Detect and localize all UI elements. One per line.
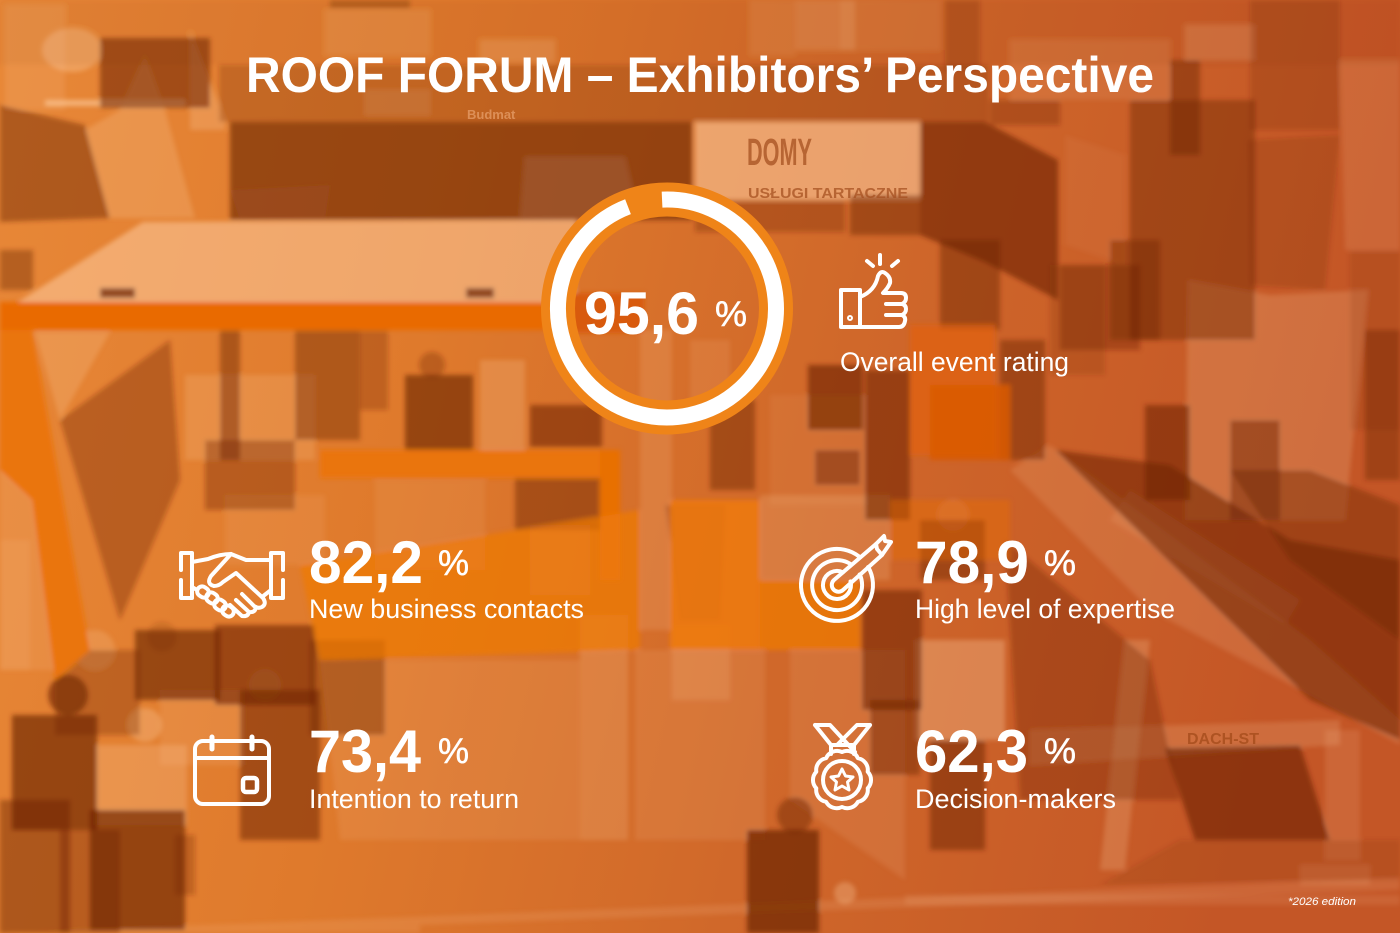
value: 62,3 [915,718,1028,785]
title: ROOF FORUM – Exhibitors’ Perspective [246,47,1154,103]
label: New business contacts [309,594,584,624]
stat: new business contacts [181,529,584,624]
value: 73,4 [309,718,422,785]
label: High level of expertise [915,594,1175,624]
percent sign: % [438,544,469,583]
label: Decision-makers [915,784,1116,814]
stat: intention to return [195,718,519,814]
icon: medal [813,725,871,808]
background: tinted exhibition hall photo: Budmat [467,107,516,122]
value: 78,9 [915,529,1029,596]
label: Overall event rating [840,347,1069,377]
stat: overall event rating [840,255,1069,377]
background: tinted exhibition hall photo: DACH-ST [1187,731,1259,748]
percent sign: % [1044,732,1076,771]
icon: calendar [195,737,269,804]
donut chart: overall event rating [558,199,776,418]
value: 82,2 [309,529,423,596]
stat: decision-makers [813,718,1116,814]
icon: target with arrow [801,536,891,621]
percent sign: % [438,732,469,771]
icon: handshake [181,553,283,619]
saturated orange areas [0,302,545,330]
background: tinted exhibition hall photo: DOMY [747,132,812,174]
percent sign: % [1044,544,1076,583]
donut value: 95,6 [584,280,699,347]
background: tinted exhibition hall photo: USŁUGI TARTACZNE [748,185,908,202]
stat: high level of expertise [801,529,1175,624]
footnote: *2026 edition [1288,896,1356,908]
label: Intention to return [309,784,519,814]
icon: thumbs up [841,255,906,327]
donut percent sign: % [715,295,747,334]
